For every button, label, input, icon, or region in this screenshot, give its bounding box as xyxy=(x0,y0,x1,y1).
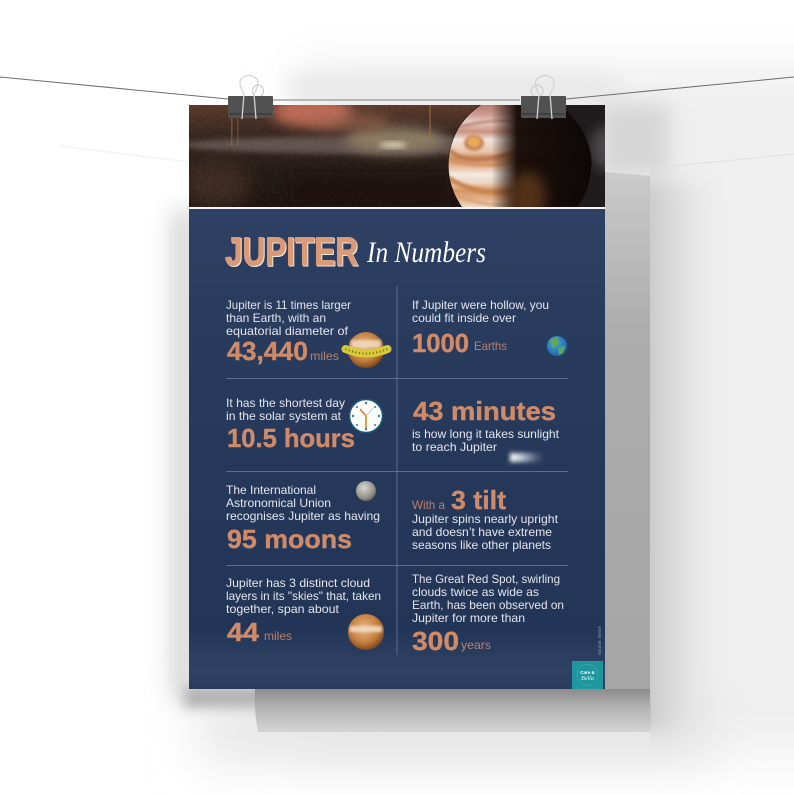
fact: cloud layers: together, span about xyxy=(226,602,340,616)
fact: great red spot: years xyxy=(461,638,491,652)
fact: great red spot: clouds twice as wide as xyxy=(412,585,539,599)
white separator strip xyxy=(189,207,605,210)
planet Jupiter xyxy=(448,105,592,207)
fact: tilt: and doesn’t have extreme xyxy=(412,525,552,539)
fact: cloud layers: miles xyxy=(264,629,292,643)
fact: sunlight xyxy=(412,396,560,462)
logo badge xyxy=(572,661,603,689)
fact: moons: The International xyxy=(226,483,316,497)
fact: moons: Astronomical Union xyxy=(226,496,331,510)
cloud bands xyxy=(448,121,520,206)
poster sheet xyxy=(180,90,626,689)
fact: diameter: Jupiter is 11 times larger xyxy=(226,298,351,312)
fact: shortest day xyxy=(226,396,382,453)
fact: fit inside: 1000 xyxy=(412,328,469,358)
fact: moons: 95 moons xyxy=(227,524,352,554)
icon: Jupiter xyxy=(348,614,384,650)
fact: fit inside: could fit inside over xyxy=(412,311,516,325)
fact: cloud layers: Jupiter has 3 distinct cloud xyxy=(226,576,370,590)
fact: great red spot: Jupiter for more than xyxy=(412,611,525,625)
fact: diameter: 43,440 xyxy=(227,336,308,366)
logo badge: Care & xyxy=(580,670,595,675)
fact: fit inside: Earths xyxy=(474,339,507,353)
navy panel xyxy=(189,209,605,689)
grid dividers xyxy=(226,286,568,655)
hanging wire xyxy=(0,77,794,100)
fact: fit inside: If Jupiter were hollow, you xyxy=(412,298,549,312)
fact: tilt: Jupiter spins nearly upright xyxy=(412,512,559,526)
title: JUPITER xyxy=(225,230,358,274)
fact: great red spot: 300 xyxy=(412,626,459,656)
title: In Numbers xyxy=(366,236,486,269)
fact: diameter xyxy=(226,298,388,368)
icon: clock xyxy=(350,400,382,432)
title: JUPITER xyxy=(226,231,359,275)
source note: Source: NASA xyxy=(597,626,602,655)
fact: diameter: than Earth, with an xyxy=(226,311,326,325)
icon: moon xyxy=(356,481,376,501)
title xyxy=(225,230,486,275)
binder clip left xyxy=(228,76,273,119)
fact: shortest day: It has the shortest day xyxy=(226,396,345,410)
fact: sunlight: to reach Jupiter xyxy=(412,440,497,454)
header image: galaxy and Jupiter xyxy=(189,105,605,207)
logo badge: Bella xyxy=(581,676,594,682)
great red spot xyxy=(464,135,484,151)
fact: tilt xyxy=(412,485,559,552)
fact: diameter: miles xyxy=(310,349,339,363)
fact: diameter: equatorial diameter of xyxy=(226,324,349,338)
wire shadow lines xyxy=(612,154,794,172)
fact: sunlight: 43 minutes xyxy=(413,396,556,426)
fact: shortest day: in the solar system at xyxy=(226,409,342,423)
binder clip right xyxy=(521,76,566,119)
fact: great red spot xyxy=(412,572,564,656)
fact: sunlight: is how long it takes sunlight xyxy=(412,427,560,441)
fact: cloud layers: layers in its "skies" that, taken xyxy=(226,589,381,603)
fact: cloud layers xyxy=(226,576,384,650)
fact: fit inside xyxy=(412,298,567,358)
fact: moons: recognises Jupiter as having xyxy=(226,509,380,523)
fact: tilt: 3 tilt xyxy=(451,485,506,515)
icon: earth xyxy=(547,336,567,356)
fact: great red spot: Earth, has been observed on xyxy=(412,598,564,612)
fact: great red spot: The Great Red Spot, swirling xyxy=(412,572,560,586)
fact: moons xyxy=(226,481,380,554)
fact: tilt: With a xyxy=(412,498,445,512)
fact: tilt: seasons like other planets xyxy=(412,538,551,552)
fact: shortest day: 10.5 hours xyxy=(227,423,355,453)
fact: cloud layers: 44 xyxy=(227,617,260,647)
icon: light beam xyxy=(510,453,544,462)
icon: planet with tape measure xyxy=(346,332,388,368)
